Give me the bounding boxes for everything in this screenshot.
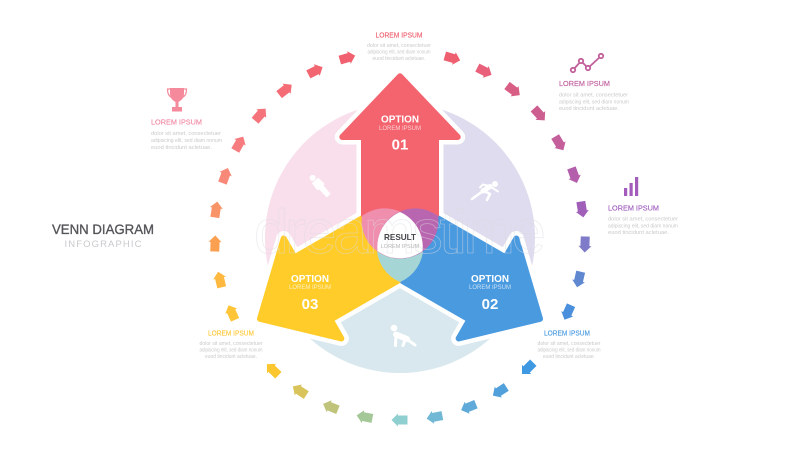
title <box>52 221 154 250</box>
arrow 02 blue <box>371 188 569 369</box>
text block: top right <box>559 79 629 112</box>
watermark: dreamstime <box>254 198 546 267</box>
text block: right: LOREM IPSUM <box>608 204 659 212</box>
icon: bar chart <box>624 177 638 196</box>
icon: crouching figure <box>391 325 415 346</box>
result label: LOREM IPSUM <box>381 244 420 250</box>
text block: top: dolor sit amet, consectetuer <box>367 43 431 49</box>
option 01 label: OPTION <box>381 114 419 126</box>
text block: top right: dolor sit amet, consectetuer <box>559 92 628 98</box>
result label <box>381 232 420 250</box>
venn lens: pink <box>362 208 423 259</box>
option 02 label <box>469 273 511 313</box>
text block: lower left <box>200 328 263 360</box>
option 01 label: 01 <box>392 136 408 154</box>
option 02 label: 02 <box>482 296 498 313</box>
option 01 label <box>379 114 421 154</box>
arrow 01 red <box>342 76 458 238</box>
icon: line chart <box>571 54 603 72</box>
option 03 label <box>289 273 331 313</box>
text block: lower left: adipiscing elit, sed diam nonum <box>200 348 263 354</box>
venn centre <box>377 212 423 258</box>
text block: lower right: euod tincidunt acletuae. <box>543 354 595 360</box>
text block: lower right <box>538 328 601 360</box>
icon: trophy <box>168 88 186 112</box>
text block: right: euod tincidunt acletuae. <box>608 230 669 236</box>
text block: lower left: dolor sit amet, consectetuer <box>200 341 263 347</box>
title: VENN DIAGRAM <box>52 221 154 237</box>
option 01 label: LOREM IPSUM <box>379 126 421 132</box>
text block: top left: LOREM IPSUM <box>151 118 202 126</box>
text block: lower right: adipiscing elit, sed diam nonum <box>538 348 601 354</box>
text block: top: euod tincidunt acletuae. <box>372 56 426 62</box>
background circle sectors <box>265 103 535 373</box>
venn lens: teal <box>377 212 423 282</box>
text block: top: LOREM IPSUM <box>376 30 422 40</box>
venn lens: purple <box>377 208 438 259</box>
text block: lower left: euod tincidunt acletuae. <box>205 354 257 360</box>
text block: top right: LOREM IPSUM <box>559 79 610 88</box>
arrow 03 yellow <box>231 188 429 369</box>
small arrow ring <box>208 49 592 427</box>
option 03 label: LOREM IPSUM <box>289 285 331 291</box>
text block: top: adipiscing elit, sed diam nonum <box>368 50 431 56</box>
text block: top left: dolor sit amet, consectetuer <box>151 131 221 137</box>
text block: top right: euod tincidunt acletuae. <box>559 106 619 112</box>
text block: top left: euod tincidunt acletuae. <box>151 145 212 151</box>
arrow outlines <box>231 76 569 369</box>
venn overlaps <box>362 208 438 282</box>
text block: top <box>367 30 431 62</box>
text block: lower left: LOREM IPSUM <box>208 328 254 338</box>
text block: right: adipiscing elit, sed diam nonum <box>608 224 678 230</box>
text block: lower right: dolor sit amet, consectetuer <box>538 341 601 347</box>
text block: right <box>608 204 678 236</box>
icon: runner <box>472 181 498 200</box>
option 02 label: LOREM IPSUM <box>469 285 511 291</box>
text block: top right: adipiscing elit, sed diam nonum <box>559 100 629 106</box>
text block: lower right: LOREM IPSUM <box>544 328 590 338</box>
option 03 label: OPTION <box>291 273 329 285</box>
option 02 label: OPTION <box>471 273 509 285</box>
text block: top left: adipiscing elit, sed diam nonum <box>151 138 222 144</box>
title: INFOGRAPHIC <box>64 239 142 250</box>
text block: top left <box>151 118 222 151</box>
text block: right: dolor sit amet, consectetuer <box>608 216 678 222</box>
result label: RESULT <box>384 232 417 242</box>
option 03 label: 03 <box>302 296 318 313</box>
icon: standing figure <box>307 172 332 199</box>
